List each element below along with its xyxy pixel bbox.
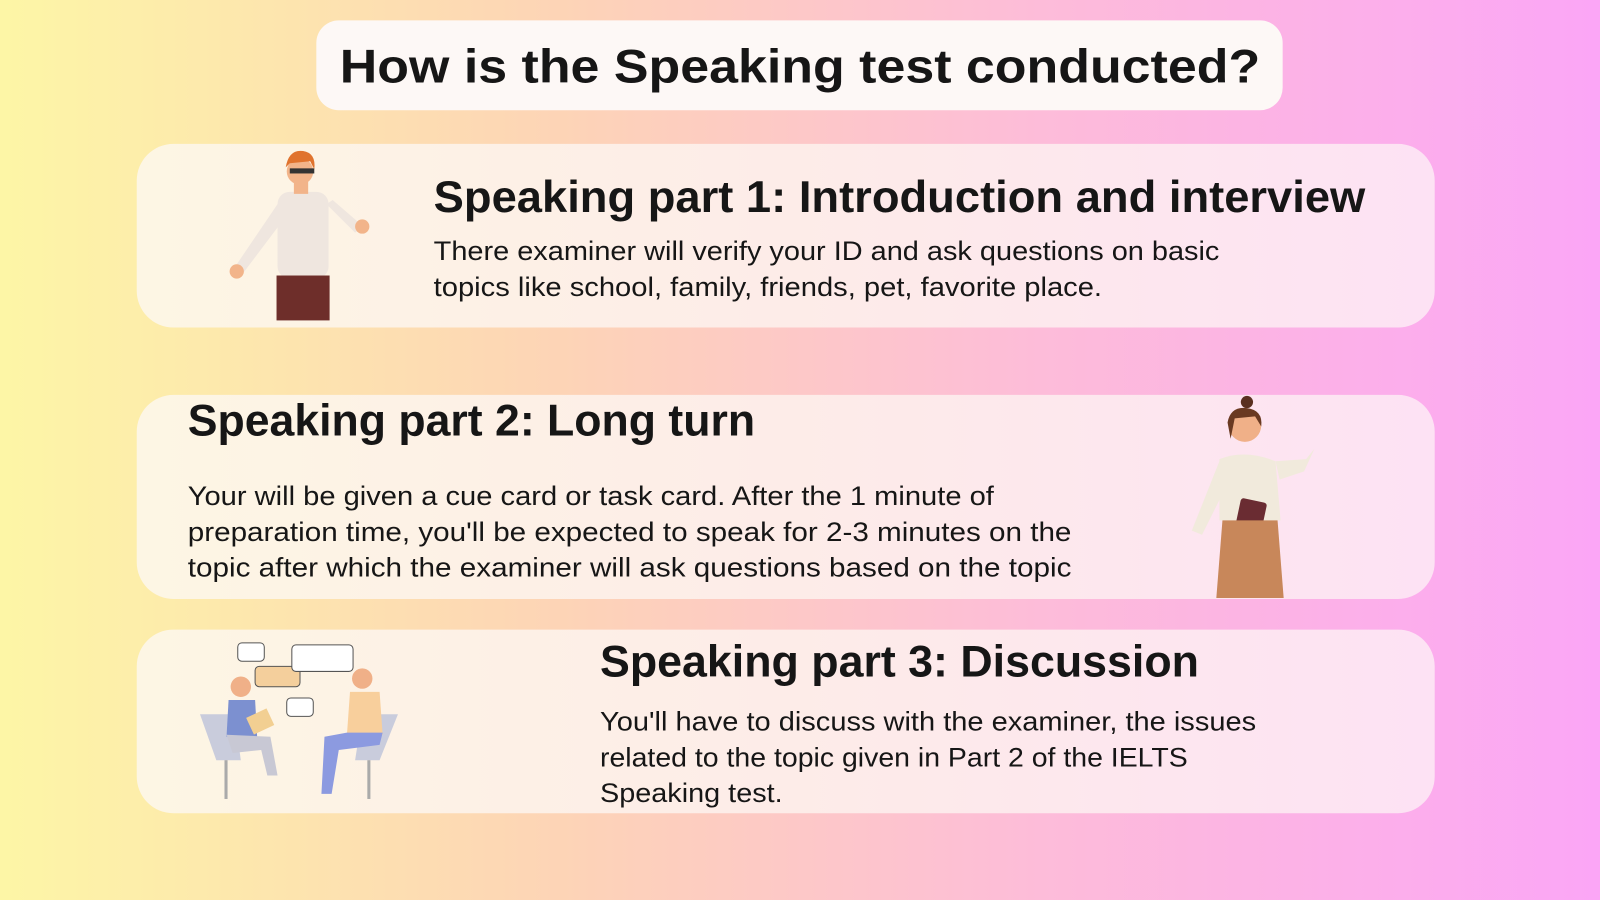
panel: part 2 [137,395,1435,599]
text: part 3 body [600,707,1256,808]
text: part 2 body [188,481,1071,583]
text: part 1 body: topics like school, family, friends, pet, favorite place. [434,272,1102,302]
heading: part 2: Speaking part 2: Long turn [188,395,755,446]
heading: part 1: Speaking part 1: Introduction and interview [434,171,1365,222]
heading: part 3: Speaking part 3: Discussion [600,636,1199,687]
text: part 2 body: preparation time, you'll be expected to speak for 2-3 minutes on the [188,517,1071,547]
icon: man presenting [230,151,369,320]
text: part 3 body: You'll have to discuss with the examiner, the issues [600,707,1256,737]
panel: part 3 [137,630,1435,813]
icon: woman with clipboard [1192,396,1314,598]
title [316,20,1283,110]
text: part 1 body [434,236,1219,302]
text: part 1 body: There examiner will verify your ID and ask questions on basic [434,236,1219,266]
text: part 3 body: related to the topic given in Part 2 of the IELTS [600,742,1188,772]
title: How is the Speaking test conducted? [340,41,1260,93]
text: part 3 body: Speaking test. [600,778,783,808]
icon: two people discussing [200,643,398,799]
text: part 2 body: topic after which the examiner will ask questions based on the topic [188,553,1071,583]
panel: part 1 [137,144,1435,328]
text: part 2 body: Your will be given a cue card or task card. After the 1 minute of [188,481,995,511]
